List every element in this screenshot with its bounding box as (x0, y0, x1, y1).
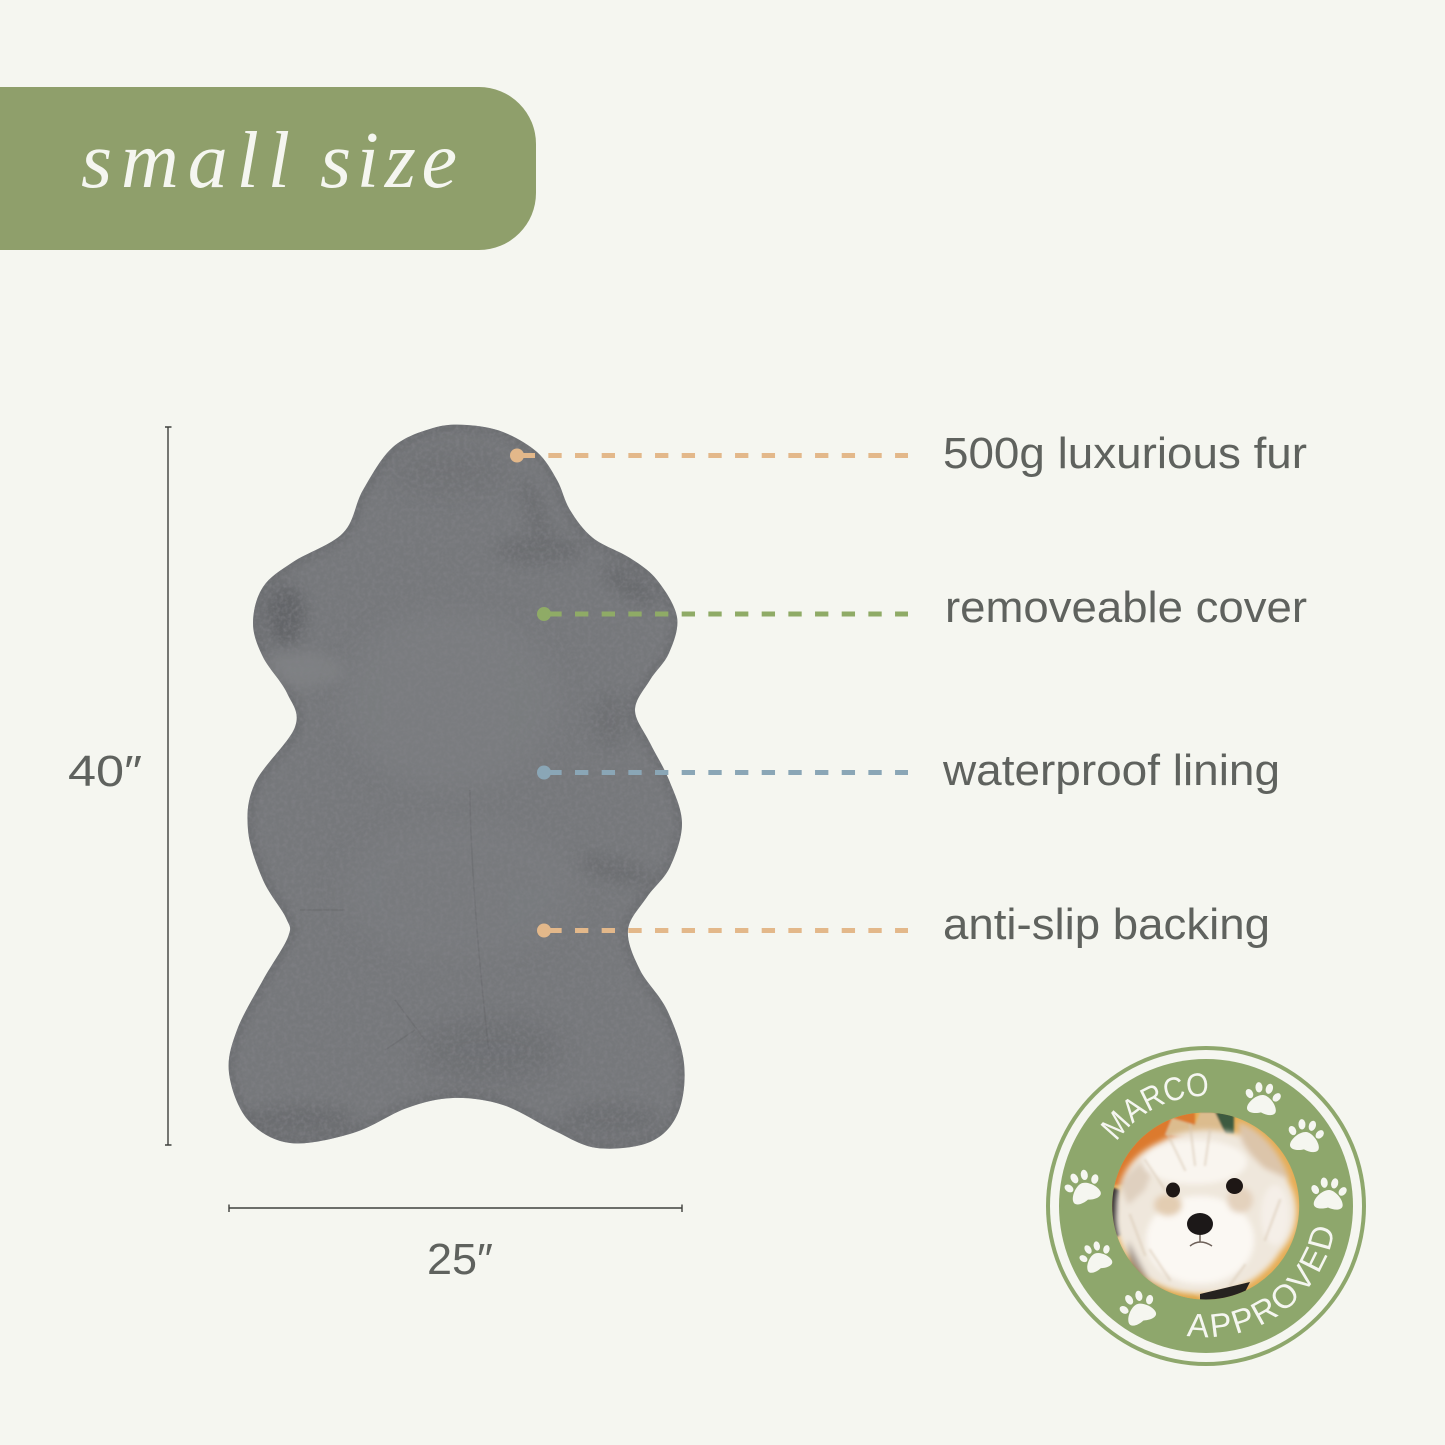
grey fur rug (229, 425, 685, 1149)
size banner (0, 87, 536, 250)
callout: backing (537, 900, 1270, 949)
badge text: MARCO: MARCO (1100, 1073, 1208, 1140)
dog nose (1187, 1213, 1213, 1235)
callout label: fur: 500g luxurious fur (943, 429, 1307, 478)
badge text: APPROVED: APPROVED (1186, 1227, 1333, 1338)
callout label: lining: waterproof lining (942, 746, 1280, 795)
heading: small size: size (320, 117, 457, 205)
dog photo (1112, 1112, 1300, 1300)
callout: lining (537, 746, 1280, 795)
paw icons (1059, 1080, 1349, 1329)
callout label: backing: anti-slip backing (943, 900, 1270, 949)
height dimension (68, 427, 172, 1145)
badge: Marco approved (1046, 1046, 1366, 1366)
width dimension (229, 1204, 682, 1284)
dog eyes (1166, 1178, 1243, 1198)
callout: fur (510, 429, 1307, 478)
width label: 25″ (427, 1235, 493, 1284)
callout label: cover: removeable cover (945, 583, 1307, 632)
height label: 40″ (68, 747, 142, 796)
callout: cover (537, 583, 1307, 632)
heading: small size: small (81, 117, 290, 205)
